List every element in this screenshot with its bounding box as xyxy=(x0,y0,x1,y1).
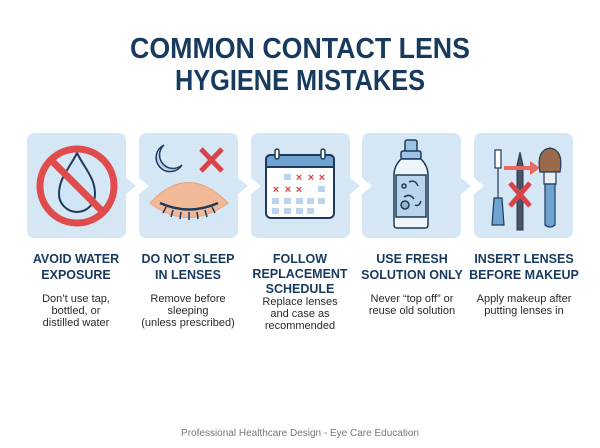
icon: calendar: × xyxy=(296,172,302,184)
icon: closed eye xyxy=(150,182,228,220)
icon: bottle xyxy=(394,140,428,228)
panel: makeup xyxy=(474,133,573,238)
descriptions: putting lenses in xyxy=(484,305,564,317)
icon: calendar xyxy=(266,149,334,218)
footer: Professional Healthcare Design - Eye Care Education xyxy=(181,428,419,439)
descriptions: (unless prescribed) xyxy=(141,317,235,329)
headings: EXPOSURE xyxy=(41,268,111,282)
title xyxy=(130,33,470,97)
headings: INSERT LENSES xyxy=(474,252,574,266)
headings xyxy=(33,252,579,296)
arrow xyxy=(504,161,540,175)
panel: solution xyxy=(362,133,471,238)
descriptions: Replace lenses xyxy=(262,296,338,308)
icon: eyeliner xyxy=(517,152,523,230)
icon: mascara xyxy=(492,150,504,225)
headings: AVOID WATER xyxy=(33,252,119,266)
panel: water xyxy=(27,133,136,238)
panel: schedule xyxy=(251,133,360,238)
headings: USE FRESH xyxy=(376,252,448,266)
headings: SOLUTION ONLY xyxy=(361,268,463,282)
descriptions: and case as xyxy=(270,308,330,320)
descriptions: sleeping xyxy=(168,305,208,317)
headings: SCHEDULE xyxy=(266,282,334,296)
descriptions: recommended xyxy=(265,320,335,332)
icon: calendar: × xyxy=(319,172,325,184)
icon: brush xyxy=(539,148,561,227)
title: COMMON CONTACT LENS xyxy=(130,33,470,65)
headings: BEFORE MAKEUP xyxy=(469,268,579,282)
descriptions: Never “top off” or xyxy=(371,293,454,305)
icon: water drop prohibited xyxy=(40,149,114,223)
descriptions: distilled water xyxy=(43,317,110,329)
icon: calendar: × xyxy=(308,172,314,184)
headings: REPLACEMENT xyxy=(252,267,348,281)
descriptions: bottled, or xyxy=(52,305,101,317)
descriptions: Remove before xyxy=(150,293,226,305)
icon: calendar: × xyxy=(285,184,291,196)
icon: calendar: × xyxy=(273,184,279,196)
icon: moon xyxy=(156,145,182,172)
panel: sleep xyxy=(139,133,248,238)
icon: calendar: × xyxy=(296,184,302,196)
descriptions: Don’t use tap, xyxy=(42,293,110,305)
descriptions: reuse old solution xyxy=(369,305,455,317)
headings: IN LENSES xyxy=(155,268,221,282)
descriptions xyxy=(42,293,572,332)
title: HYGIENE MISTAKES xyxy=(175,65,425,97)
headings: FOLLOW xyxy=(273,252,327,266)
icon: red x xyxy=(510,183,530,206)
headings: DO NOT SLEEP xyxy=(141,252,235,266)
descriptions: Apply makeup after xyxy=(477,293,572,305)
icon: red x xyxy=(201,149,222,171)
